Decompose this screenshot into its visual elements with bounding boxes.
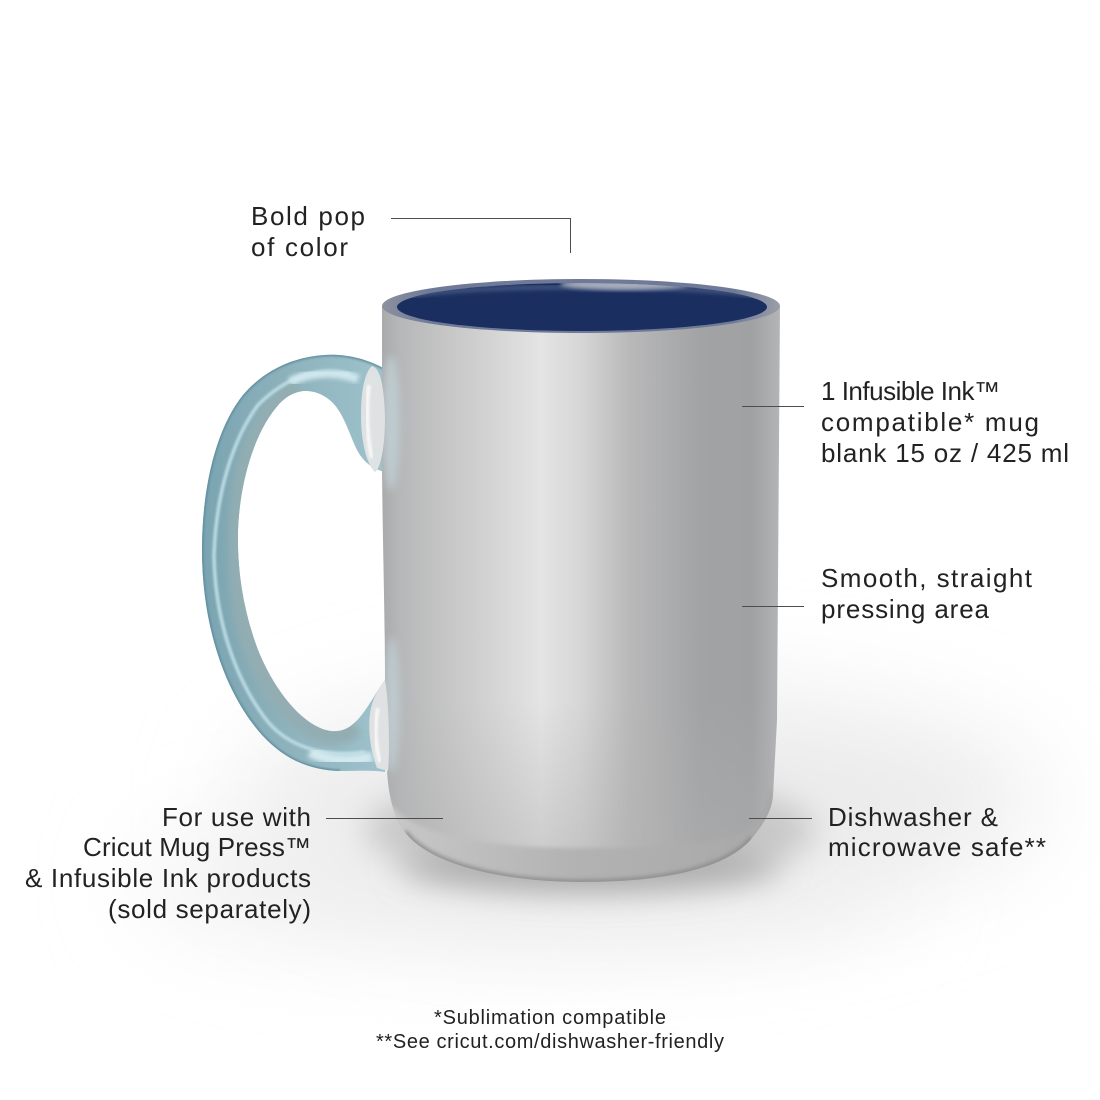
callout: bold pop of color: of color bbox=[251, 232, 348, 262]
callout: pressing area: Smooth, straight bbox=[821, 563, 1033, 593]
callout: mug blank: 1 Infusible Ink™ bbox=[821, 376, 1000, 406]
callout: for use with: Cricut Mug Press™ bbox=[83, 832, 311, 862]
handle joint: bottom bbox=[369, 680, 389, 771]
callout: mug blank: blank 15 oz / 425 ml bbox=[821, 438, 1069, 468]
callout: dishwasher safe: Dishwasher & bbox=[828, 802, 998, 832]
callout: bold pop of color: Bold pop bbox=[251, 201, 365, 231]
infographic bbox=[26, 206, 1068, 1052]
icon: mug bbox=[202, 278, 790, 890]
callout: bold pop of color bbox=[251, 201, 570, 262]
footnotes: *Sublimation compatible bbox=[434, 1007, 666, 1029]
callout: mug blank: compatible* mug bbox=[821, 407, 1039, 437]
callout: for use with: For use with bbox=[162, 802, 311, 832]
callout: for use with bbox=[25, 802, 443, 924]
callout: mug blank bbox=[742, 376, 1069, 468]
mug body bbox=[382, 306, 780, 882]
footnotes bbox=[376, 1007, 724, 1053]
callout: for use with: & Infusible Ink products bbox=[25, 863, 311, 893]
callout: dishwasher safe bbox=[749, 802, 1046, 862]
footnotes: **See cricut.com/dishwasher-friendly bbox=[376, 1031, 724, 1053]
callout: pressing area: pressing area bbox=[821, 594, 990, 624]
callout: dishwasher safe: microwave safe** bbox=[828, 832, 1046, 862]
mug rim bbox=[382, 279, 780, 333]
mug interior bbox=[397, 278, 767, 331]
body base shading bbox=[375, 306, 790, 890]
floor shadow bbox=[140, 690, 1040, 940]
handle joint: top bbox=[361, 366, 385, 472]
mug handle bbox=[202, 355, 385, 772]
callout: for use with: (sold separately) bbox=[108, 894, 311, 924]
callout: pressing area bbox=[742, 563, 1033, 624]
